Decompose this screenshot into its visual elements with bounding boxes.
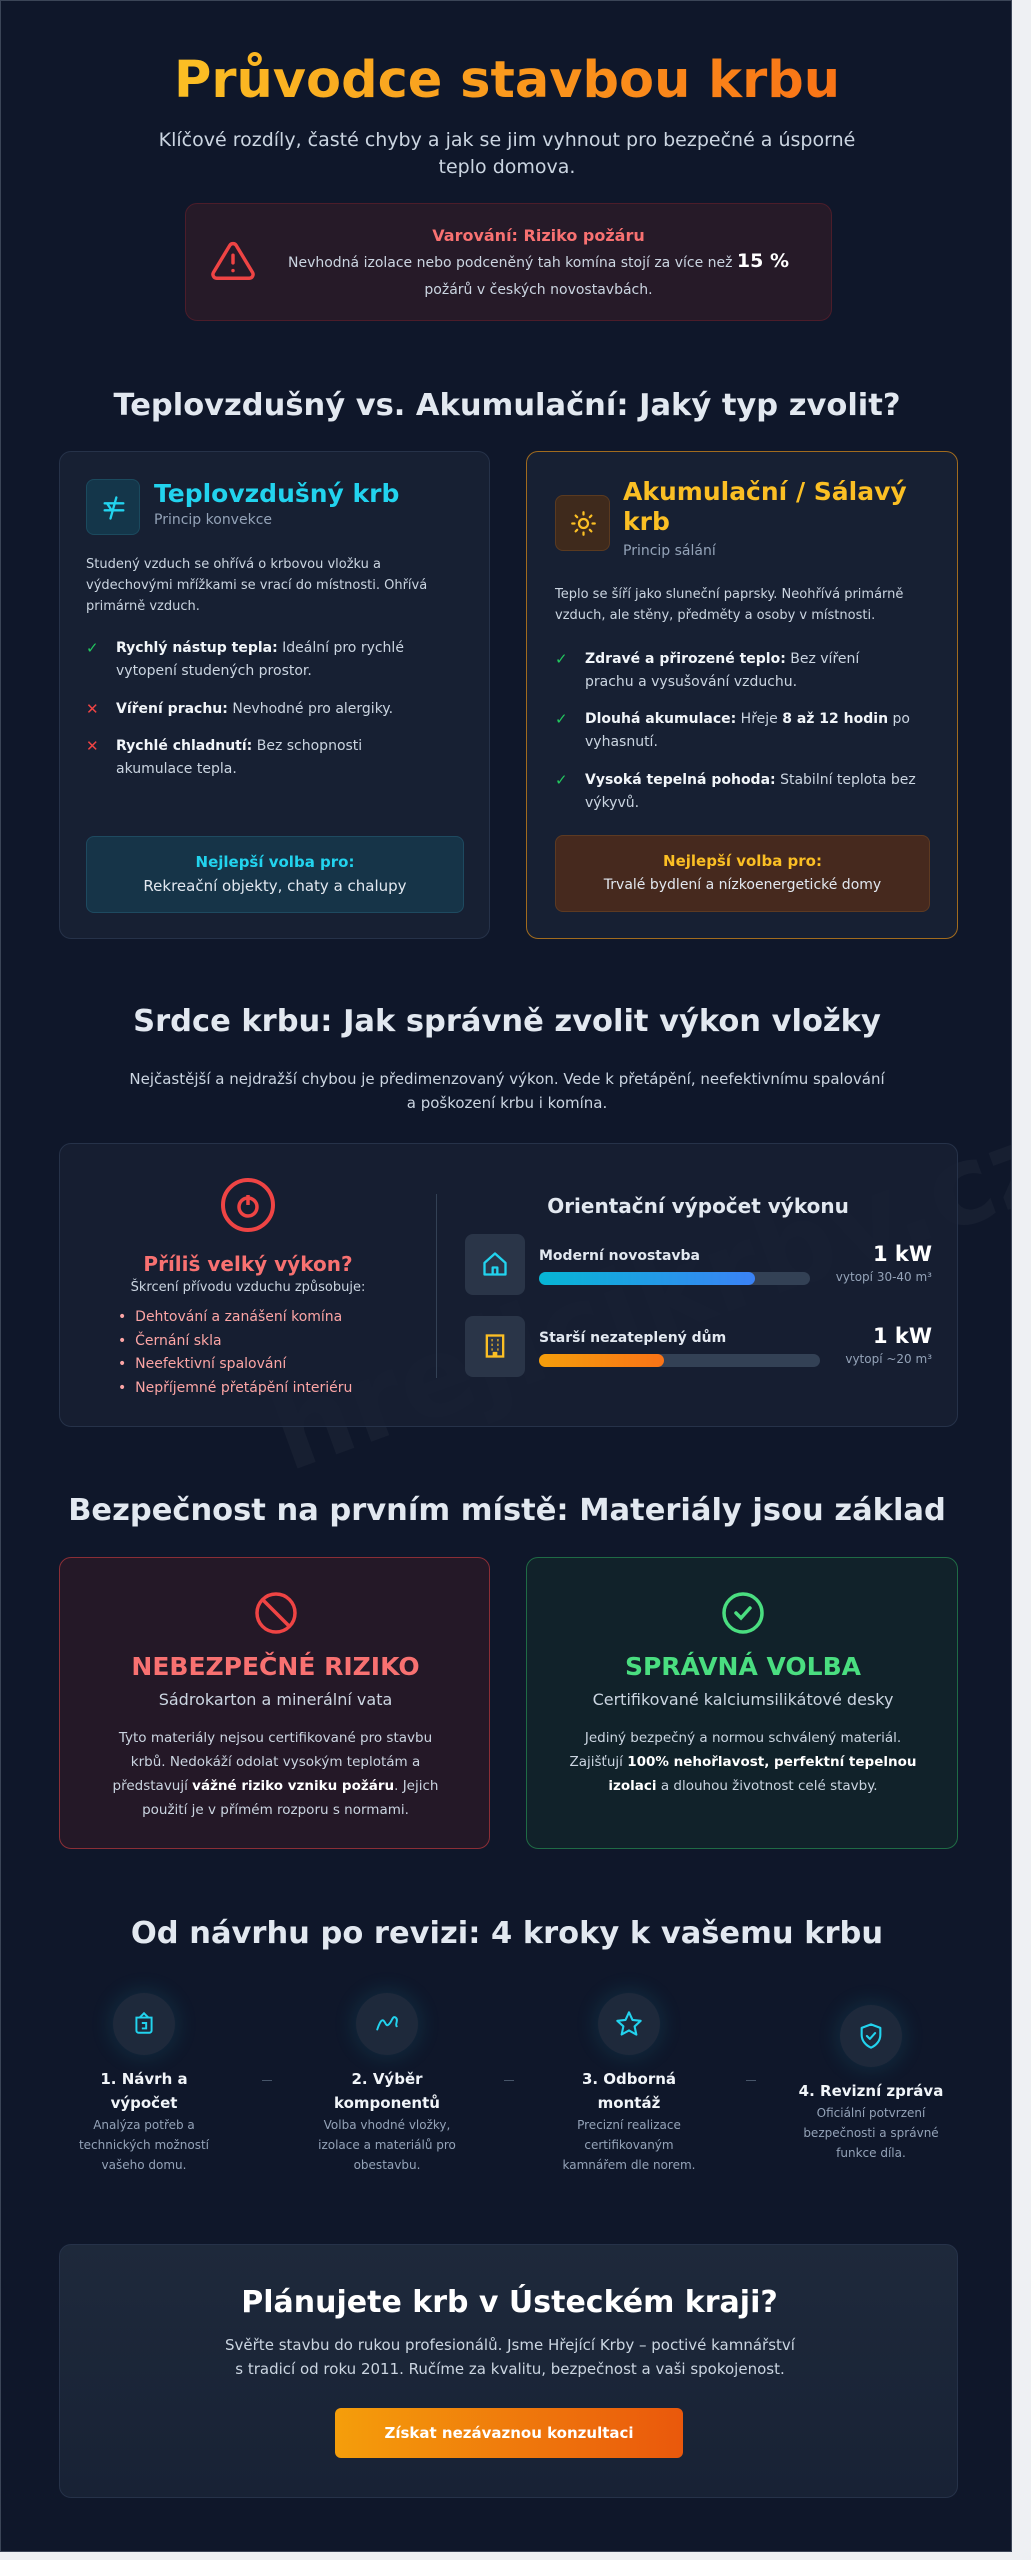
row: old house: 1 kW bbox=[873, 1324, 932, 1348]
panel: call to action: Svěřte stavbu do rukou profesionálů. Jsme Hřející Krby – poctivé kamnářství bbox=[225, 2336, 795, 2354]
step 2: 2. Výběr bbox=[351, 2070, 423, 2088]
steps row bbox=[79, 1990, 943, 2172]
step 2: komponentů bbox=[334, 2094, 440, 2112]
step 3: montáž bbox=[598, 2094, 660, 2112]
best for box: Trvalé bydlení a nízkoenergetické domy bbox=[604, 877, 881, 893]
pros list: ✓ bbox=[555, 710, 568, 728]
calculation heading: Orientační výpočet výkonu bbox=[547, 1194, 849, 1218]
step 2: Volba vhodné vložky, izolace a materiálů pro obestavbu. bbox=[318, 2118, 456, 2172]
consequences list: • Nepříjemné přetápění interiéru bbox=[118, 1380, 352, 1396]
power intro text: Nejčastější a nejdražší chybou je předimenzovaný výkon. Vede k přetápění, neefektivnímu spalování bbox=[129, 1070, 885, 1088]
row: modern house bbox=[465, 1234, 932, 1295]
pros & cons list: Rychlé chladnutí: Bez schopnosti akumulace tepla. bbox=[116, 738, 362, 777]
step 2 bbox=[318, 1990, 456, 2172]
power intro text bbox=[129, 1070, 885, 1112]
warning text bbox=[288, 226, 789, 298]
best for box bbox=[86, 836, 464, 913]
icon: building bbox=[465, 1316, 525, 1377]
best for box: Rekreační objekty, chaty a chalupy bbox=[143, 877, 407, 895]
pros & cons list: ✓ bbox=[86, 639, 99, 657]
row: old house: Starší nezateplený dům bbox=[539, 1330, 726, 1346]
description: Teplo se šíří jako sluneční paprsky. Neohřívá primárně vzduch, ale stěny, předměty a osoby v místnosti. bbox=[555, 587, 903, 623]
consequences list: • Dehtování a zanášení komína bbox=[118, 1309, 342, 1325]
heading: steps: Od návrhu po revizi: 4 kroky k vašemu krbu bbox=[131, 1916, 883, 1951]
row: modern house: Moderní novostavba bbox=[539, 1248, 700, 1264]
icon: house bbox=[465, 1234, 525, 1295]
pros list: ✓ bbox=[555, 650, 568, 668]
warning text: Varování: Riziko požáru bbox=[432, 226, 645, 245]
panel: correct materials: Jediný bezpečný a normou schválený materiál. Zajišťují 100% nehořlavost, perfektní tepelnou izolaci a dlouhou životnost celé stavby. bbox=[570, 1730, 916, 1794]
step 4: 4. Revizní zpráva bbox=[799, 2082, 943, 2100]
step 3: Precizní realizace certifikovaným kamnářem dle norem. bbox=[563, 2118, 695, 2172]
title: Průvodce stavbou krbu bbox=[174, 51, 840, 110]
pros list: Vysoká tepelná pohoda: Stabilní teplota bez výkyvů. bbox=[585, 772, 916, 811]
heading: power: Srdce krbu: Jak správně zvolit výkon vložky bbox=[133, 1004, 881, 1039]
consequences list: • Neefektivní spalování bbox=[118, 1356, 286, 1372]
panel: dangerous materials: Sádrokarton a minerální vata bbox=[159, 1690, 392, 1709]
icon: sun bbox=[555, 495, 610, 551]
panel: power calculation bbox=[59, 1143, 958, 1427]
pros & cons list bbox=[86, 639, 404, 777]
pros & cons list: Rychlý nástup tepla: Ideální pro rychlé vytopení studených prostor. bbox=[116, 640, 404, 679]
consequences list bbox=[118, 1309, 352, 1396]
callout: fire warning bbox=[185, 203, 832, 321]
description: Studený vzduch se ohřívá o krbovou vložku a výdechovými mřížkami se vrací do místnosti. Ohřívá primárně vzduch. bbox=[86, 557, 427, 614]
subtitle: Klíčové rozdíly, časté chyby a jak se jim vyhnout pro bezpečné a úsporné teplo domova. bbox=[159, 129, 855, 178]
icon: convection bbox=[86, 479, 140, 535]
row: old house bbox=[465, 1316, 932, 1377]
step 1: 1. Návrh a bbox=[100, 2070, 188, 2088]
pros & cons list: ✕ bbox=[86, 737, 99, 755]
pros list: Zdravé a přirozené teplo: Bez víření prachu a vysušování vzduchu. bbox=[585, 651, 859, 690]
panel: convection fireplace: Princip konvekce bbox=[154, 512, 272, 528]
button bbox=[335, 2408, 683, 2458]
card title: Akumulační / Sálavý krb bbox=[623, 477, 907, 536]
step 1: výpočet bbox=[111, 2094, 177, 2112]
pros & cons list: Víření prachu: Nevhodné pro alergiky. bbox=[116, 701, 393, 717]
panel: call to action: Plánujete krb v Ústeckém kraji? bbox=[241, 2285, 778, 2320]
power intro text: a poškození krbu i komína. bbox=[407, 1094, 607, 1112]
best for box: Nejlepší volba pro: bbox=[663, 852, 822, 870]
step 1: Analýza potřeb a technických možností vašeho domu. bbox=[79, 2118, 209, 2172]
pros list bbox=[555, 650, 916, 811]
panel: dangerous materials: NEBEZPEČNÉ RIZIKO bbox=[131, 1652, 420, 1681]
panel: correct materials: SPRÁVNÁ VOLBA bbox=[625, 1652, 861, 1681]
icon: gauge warning bbox=[221, 1178, 275, 1232]
row: old house: vytopí ~20 m³ bbox=[845, 1352, 932, 1366]
warning text: Nevhodná izolace nebo podceněný tah komína stojí za více než 15 % požárů v českých novostavbách. bbox=[288, 250, 789, 298]
heading: safety: Bezpečnost na prvním místě: Materiály jsou základ bbox=[68, 1493, 946, 1528]
icon: forbidden bbox=[255, 1592, 297, 1634]
pros list: Dlouhá akumulace: Hřeje 8 až 12 hodin po vyhasnutí. bbox=[585, 711, 910, 750]
step 4: Oficiální potvrzení bezpečnosti a správné funkce díla. bbox=[803, 2106, 939, 2160]
panel: correct materials: Certifikované kalciumsilikátové desky bbox=[593, 1690, 893, 1709]
icon: warning triangle bbox=[211, 242, 255, 280]
heading: types: Teplovzdušný vs. Akumulační: Jaký typ zvolit? bbox=[113, 388, 901, 423]
too much power text bbox=[131, 1252, 365, 1295]
consequences list: • Černání skla bbox=[118, 1332, 222, 1348]
too much power text: Škrcení přívodu vzduchu způsobuje: bbox=[131, 1280, 365, 1295]
panel: accumulation fireplace bbox=[526, 451, 958, 939]
panel: dangerous materials bbox=[59, 1557, 490, 1849]
pros list: ✓ bbox=[555, 771, 568, 789]
pros & cons list: ✕ bbox=[86, 700, 99, 718]
too much power text: Příliš velký výkon? bbox=[143, 1252, 353, 1276]
panel: call to action bbox=[59, 2244, 958, 2498]
step 3 bbox=[563, 1990, 695, 2172]
card title: Teplovzdušný krb bbox=[154, 479, 399, 508]
icon: check circle bbox=[722, 1592, 764, 1634]
row: modern house: vytopí 30-40 m³ bbox=[836, 1270, 932, 1284]
step 3: 3. Odborná bbox=[582, 2070, 676, 2088]
panel: call to action: s tradicí od roku 2011. Ručíme za kvalitu, bezpečnost a vaši spokojenost. bbox=[235, 2360, 785, 2378]
panel: dangerous materials: Tyto materiály nejsou certifikované pro stavbu krbů. Nedokáží odolat vysokým teplotám a představují vážné riziko vzniku požáru. Jejich použití je v přímém rozporu s normami. bbox=[113, 1730, 438, 1818]
panel: accumulation fireplace: Princip sálání bbox=[623, 543, 716, 559]
row: modern house: 1 kW bbox=[873, 1242, 932, 1266]
step 1 bbox=[79, 1990, 210, 2172]
panel: correct materials bbox=[526, 1557, 958, 1849]
best for box bbox=[555, 835, 930, 912]
step 4 bbox=[799, 2002, 943, 2160]
button: Získat nezávaznou konzultaci bbox=[384, 2424, 634, 2442]
best for box: Nejlepší volba pro: bbox=[196, 853, 354, 871]
panel: convection fireplace bbox=[59, 451, 490, 939]
